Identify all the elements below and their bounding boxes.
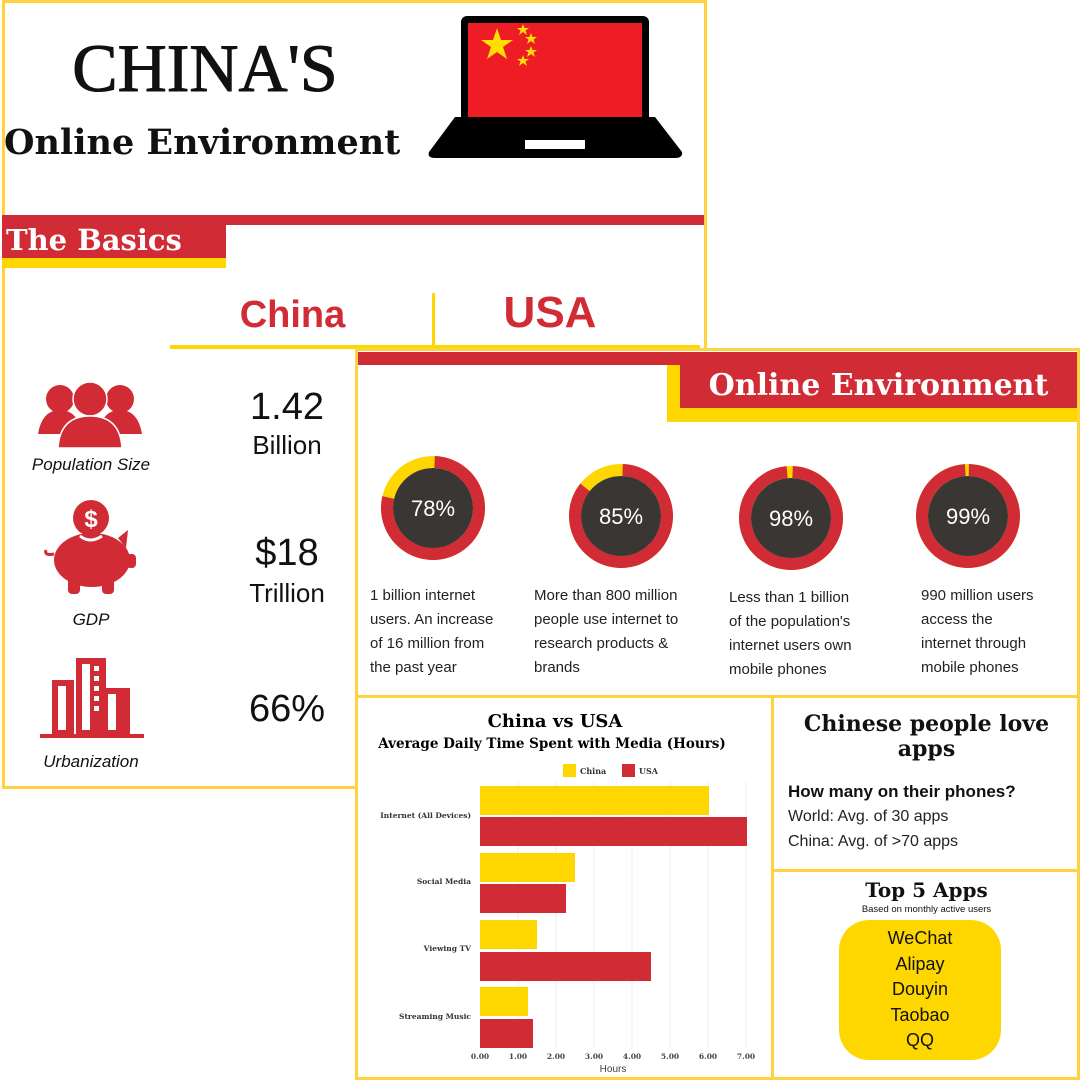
chart: daily media time: 4.00 (623, 1052, 641, 1061)
donut: 85%: 85% (599, 504, 643, 529)
chart: daily media time (377, 711, 755, 1075)
subtitle: Online Environment: Online Environment (4, 122, 400, 163)
donut: 98% (739, 466, 843, 570)
donut: 98%: 98% (769, 506, 813, 531)
yellow list box: Alipay (895, 954, 945, 974)
panel: top 5 apps: Based on monthly active users (862, 904, 991, 915)
bars (480, 786, 747, 1048)
value: GDP: Trillion (249, 578, 325, 608)
chart: daily media time: 2.00 (547, 1052, 565, 1061)
value: population: 1.42 (250, 386, 324, 428)
donut: 99% (916, 464, 1020, 568)
text: stat 4: mobile phones (921, 659, 1019, 676)
panel: top 5 apps (839, 878, 1001, 1060)
chart: daily media time: 3.00 (585, 1052, 603, 1061)
text: stat 1: of 16 million from (370, 635, 484, 652)
panel: apps count (788, 711, 1049, 850)
heading bar: The Basics: The Basics (6, 223, 182, 257)
chart: daily media time: 1.00 (509, 1052, 527, 1061)
label: GDP: GDP (73, 610, 109, 629)
text: stat 3: internet users own (729, 637, 852, 654)
text: stat 1: the past year (370, 659, 457, 676)
text: stat 4 (921, 587, 1034, 676)
yellow list box: Taobao (890, 1004, 950, 1024)
panel: apps count: World: Avg. of 30 apps (788, 808, 948, 825)
value: GDP: $18 (255, 532, 319, 574)
icon: piggy bank (44, 500, 136, 594)
panel: apps count: How many on their phones? (788, 782, 1016, 801)
donut: 78%: 78% (411, 496, 455, 521)
chart: daily media time: Viewing TV (423, 944, 471, 953)
donut: 99%: 99% (946, 504, 990, 529)
icon: piggy bank: $ (84, 506, 98, 533)
legend (563, 764, 659, 777)
icon: buildings (40, 658, 144, 738)
panel: apps count: China: Avg. of >70 apps (788, 833, 958, 850)
column header: China / USA (170, 288, 700, 349)
value: population: Billion (252, 430, 322, 460)
chart: daily media time: Average Daily Time Spent with Media (Hours) (377, 736, 726, 752)
text: stat 2: brands (534, 659, 580, 676)
yellow list box (839, 920, 1001, 1060)
text: stat 3: mobile phones (729, 661, 827, 678)
column header: China / USA: China (240, 294, 345, 336)
text: stat 4: access the (921, 611, 993, 628)
yellow list box: Douyin (892, 979, 948, 999)
chart: daily media time: Streaming Music (399, 1012, 471, 1021)
chart: daily media time: Hours (600, 1064, 626, 1075)
value: GDP (249, 532, 325, 608)
chart: daily media time: 5.00 (661, 1052, 679, 1061)
text: stat 3: Less than 1 billion (729, 589, 849, 606)
chart: daily media time: Internet (All Devices) (380, 811, 471, 820)
legend: USA (639, 766, 659, 776)
heading bar: Online Environment: Online Environment (709, 368, 1048, 403)
label: population size: Population Size (32, 455, 150, 474)
text: stat 1 (370, 587, 493, 676)
icon: population (38, 382, 142, 448)
title: CHINA'S: CHINA'S (72, 30, 338, 106)
column header: China / USA: USA (504, 288, 596, 337)
legend: China (580, 766, 606, 776)
chart: daily media time: 6.00 (699, 1052, 717, 1061)
text: stat 2: research products & (534, 635, 668, 652)
donut: 78% (381, 456, 485, 560)
text: stat 2 (534, 587, 678, 676)
yellow list box: QQ (906, 1030, 934, 1050)
text: stat 4: 990 million users (921, 587, 1034, 604)
label: urbanization: Urbanization (43, 752, 139, 771)
panel: apps count: Chinese people love apps (804, 711, 1049, 762)
panel: online environment (355, 348, 1080, 1080)
yellow list box: WeChat (888, 928, 952, 948)
text: stat 4: internet through (921, 635, 1026, 652)
donut: 85% (569, 464, 673, 568)
chart: daily media time: 7.00 (737, 1052, 755, 1061)
chart: daily media time: 0.00 (471, 1052, 489, 1061)
text: stat 1: 1 billion internet (370, 587, 475, 604)
value: urbanization: 66% (249, 688, 325, 730)
divider lines (355, 695, 1080, 698)
icon: laptop with flag (428, 16, 682, 158)
text: stat 2: More than 800 million (534, 587, 677, 604)
heading bar: The Basics (2, 215, 704, 268)
text: stat 3: of the population's (729, 613, 850, 630)
chart: daily media time: Social Media (417, 877, 471, 886)
panel: top 5 apps: Top 5 Apps (865, 878, 988, 902)
chart: daily media time: China vs USA (488, 711, 623, 732)
text: stat 1: users. An increase (370, 611, 493, 628)
text: stat 3 (729, 589, 852, 678)
heading bar: Online Environment (358, 352, 1077, 422)
text: stat 2: people use internet to (534, 611, 678, 628)
panel: basics (2, 0, 707, 789)
donut stats row (370, 456, 1034, 678)
value: population (250, 386, 324, 460)
